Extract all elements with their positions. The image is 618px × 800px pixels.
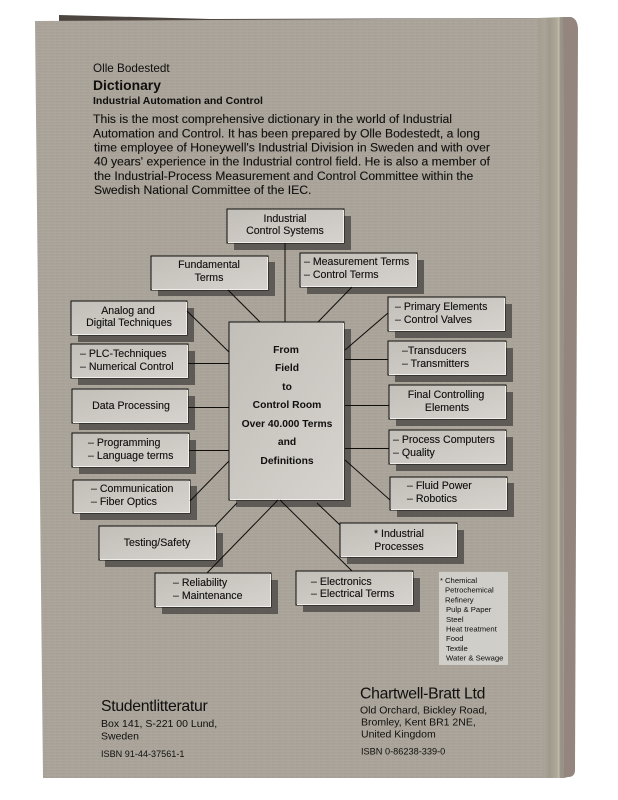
text block: description (93, 112, 491, 197)
box: Process Computers: – Process Computers (393, 434, 495, 446)
publisher: Studentlitteratur: Box 141, S-221 00 Lund, (101, 718, 217, 730)
box: Electronics: – Electrical Terms (311, 588, 394, 600)
box: Fluid Power: – Fluid Power (407, 480, 472, 492)
box: Analog and Digital Techniques: Digital Techniques (86, 317, 172, 329)
box: PLC-Techniques: – PLC-Techniques (80, 348, 167, 360)
central box: From Field to Control Room (229, 322, 351, 507)
box: Analog and Digital Techniques (71, 301, 194, 342)
box: Process Computers (389, 430, 513, 471)
central box: From Field to Control Room: to (282, 382, 292, 393)
text block: description: the Industrial-Process Measurement and Control Committee within the (94, 169, 474, 183)
note: list of industrial processes (439, 572, 508, 665)
box: PLC-Techniques (71, 344, 195, 385)
text block: description: time employee of Honeywell's Industrial Division in Sweden and with over (94, 140, 490, 154)
box: Testing/Safety (99, 526, 223, 567)
spine edge (563, 17, 578, 778)
note: list of industrial processes: Food (446, 634, 464, 643)
note: list of industrial processes: Petrochemical (445, 586, 494, 594)
publisher: Chartwell-Bratt Ltd: ISBN 0-86238-339-0 (361, 746, 445, 756)
note: list of industrial processes: Pulp & Paper (446, 605, 492, 614)
note: list of industrial processes: Chemical (445, 576, 477, 585)
box: Primary Elements (388, 297, 512, 338)
connector lines (187, 243, 390, 573)
note: list of industrial processes: Refinery (445, 596, 474, 604)
box: Final Controlling Elements: Elements (425, 402, 469, 414)
box: Reliability (155, 573, 278, 614)
box: Analog and Digital Techniques: Analog and (101, 305, 155, 317)
box: Final Controlling Elements: Final Controlling (408, 389, 484, 401)
box: Primary Elements: – Control Valves (395, 314, 472, 326)
note: list of industrial processes: Heat treatment (446, 624, 498, 634)
publisher: Chartwell-Bratt Ltd: United Kingdom (361, 728, 436, 740)
box: Fundamental Terms: Fundamental (178, 259, 240, 271)
box: Electronics: – Electronics (311, 576, 372, 588)
box: Fluid Power: – Robotics (407, 493, 457, 505)
box: Transducers: –Transducers (402, 345, 466, 357)
box: Communication: – Communication (91, 483, 174, 495)
box: Fundamental Terms: Terms (195, 272, 223, 284)
box: Industrial Control Systems (227, 209, 351, 250)
box: PLC-Techniques: – Numerical Control (80, 361, 174, 373)
box: Primary Elements: – Primary Elements (395, 301, 487, 313)
heading: author: Olle Bodestedt (93, 62, 170, 75)
box: Transducers: – Transmitters (402, 358, 469, 370)
box: Reliability: – Maintenance (173, 590, 243, 602)
publisher: Studentlitteratur: ISBN 91-44-37561-1 (101, 749, 184, 759)
central box: From Field to Control Room: Control Room (253, 400, 321, 411)
box: Fluid Power (390, 477, 514, 517)
box: Testing/Safety: Testing/Safety (124, 537, 191, 549)
publisher: Studentlitteratur: Studentlitteratur (101, 698, 207, 715)
note: list of industrial processes: * (440, 576, 443, 585)
publisher: Chartwell-Bratt Ltd: Bromley, Kent BR1 2NE, (361, 716, 476, 728)
box: Measurement Terms: – Control Terms (304, 269, 379, 281)
box: Electronics (296, 571, 420, 612)
box: Industrial Processes: Processes (374, 541, 424, 553)
spine hinge (538, 17, 564, 778)
box: Data Processing: Data Processing (92, 400, 170, 412)
box: Measurement Terms: – Measurement Terms (304, 256, 409, 268)
note: list of industrial processes: Water & Sewage (446, 654, 503, 662)
box: Reliability: – Reliability (173, 577, 228, 589)
box: Process Computers: – Quality (393, 447, 436, 459)
publisher: Chartwell-Bratt Ltd: Chartwell-Bratt Ltd (360, 686, 485, 702)
publisher: Studentlitteratur: Sweden (101, 730, 139, 742)
box: Transducers (388, 341, 513, 382)
publisher: Studentlitteratur (101, 698, 217, 759)
text block: description: Swedish National Committee of the IEC. (94, 183, 311, 197)
box: Programming (72, 433, 196, 474)
box: Fundamental Terms (151, 256, 275, 296)
central box: From Field to Control Room: Over 40.000 Terms (242, 419, 333, 430)
text block: description: Automation and Control. It has been prepared by Olle Bodestedt, a long (93, 126, 480, 140)
note: list of industrial processes: Steel (446, 615, 464, 624)
publisher: Chartwell-Bratt Ltd (360, 686, 487, 756)
central box: From Field to Control Room: Field (275, 363, 299, 374)
central box: From Field to Control Room: and (278, 437, 296, 448)
central box: From Field to Control Room: Definitions (260, 456, 314, 467)
box: Measurement Terms (300, 253, 424, 294)
publisher: Chartwell-Bratt Ltd: Old Orchard, Bickley Road, (360, 704, 487, 716)
box: Communication (73, 480, 197, 520)
box: Communication: – Fiber Optics (91, 496, 157, 508)
text block: description: This is the most comprehensive dictionary in the world of Industrial (93, 112, 452, 126)
note: list of industrial processes: Textile (446, 644, 468, 653)
text block: description: 40 years' experience in the Industrial control field. He is also a member of (94, 154, 491, 168)
box: Final Controlling Elements (389, 385, 513, 426)
heading: title: Dictionary (93, 77, 161, 93)
box: Industrial Processes: * Industrial (374, 528, 424, 540)
heading: subtitle: Industrial Automation and Control (93, 95, 263, 107)
box: Industrial Processes (340, 523, 464, 564)
box: Programming: – Programming (88, 437, 161, 449)
box: Data Processing (72, 389, 195, 430)
box: Industrial Control Systems: Industrial (264, 213, 306, 225)
central box: From Field to Control Room: From (273, 345, 299, 356)
box: Programming: – Language terms (88, 450, 173, 462)
box: Industrial Control Systems: Control Systems (246, 225, 324, 237)
